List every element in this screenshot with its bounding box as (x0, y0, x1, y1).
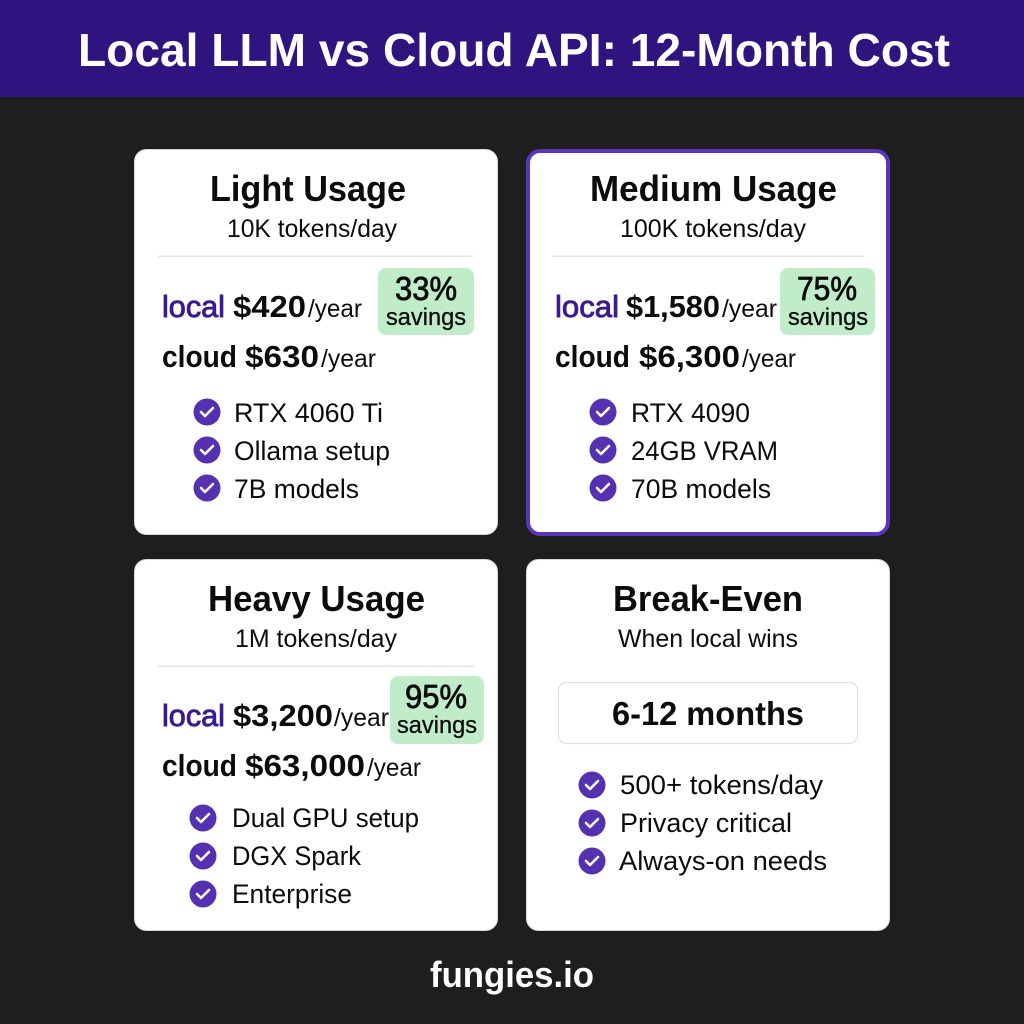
heading: medium usage: Medium Usage (590, 168, 837, 209)
cloud price (162, 339, 376, 374)
cloud price: $63,000 (245, 748, 365, 783)
local price: local (555, 289, 619, 324)
feature list: heavy (190, 803, 419, 909)
cloud price: cloud (162, 748, 237, 783)
feature list: light: RTX 4060 Ti (234, 398, 383, 428)
heading: heavy usage: Heavy Usage (208, 578, 425, 619)
callout: 6-12 months (558, 682, 858, 744)
savings badge: 95%: 95% (405, 678, 467, 715)
feature list: medium: RTX 4090 (631, 398, 750, 428)
local price: local (162, 289, 225, 324)
local price: $420 (233, 289, 306, 324)
local price: /year (722, 295, 777, 323)
savings badge: 33%: 33% (395, 270, 457, 307)
local price (555, 289, 777, 324)
cloud price: /year (321, 345, 376, 373)
cloud price: cloud (162, 339, 237, 374)
local price: $3,200 (233, 698, 333, 733)
subheading: tokens per day: 100K tokens/day (620, 215, 806, 243)
savings badge: 95% (390, 676, 484, 744)
subheading: tokens per day: 1M tokens/day (235, 625, 397, 653)
callout: 6-12 months: 6-12 months (612, 695, 804, 732)
local price: local (162, 698, 225, 733)
title: Local LLM vs Cloud API: 12-Month Cost (78, 24, 950, 76)
cloud price: /year (742, 345, 796, 373)
savings badge: 75% (780, 268, 875, 335)
panel: medium usage (highlighted) (528, 151, 888, 534)
panel: heavy usage (134, 560, 498, 930)
feature list: heavy: DGX Spark (232, 841, 361, 871)
savings badge: 95%: savings (397, 712, 477, 739)
feature list: medium (590, 398, 778, 504)
heading: light usage: Light Usage (210, 168, 406, 209)
feature list: light: Ollama setup (234, 436, 390, 466)
local price: $1,580 (626, 289, 720, 324)
feature list: heavy: Dual GPU setup (232, 803, 419, 833)
subheading: tokens per day: 10K tokens/day (227, 215, 397, 243)
panel: light usage (134, 150, 498, 534)
cloud price: cloud (555, 339, 630, 374)
feature list: heavy: Enterprise (232, 879, 352, 909)
local price (162, 698, 389, 733)
local price: /year (334, 704, 389, 732)
panel: break-even (526, 560, 890, 930)
cloud price: $6,300 (639, 339, 740, 374)
savings badge: 75%: savings (788, 304, 868, 331)
feature list: break-even: 500+ tokens/day (620, 770, 824, 800)
savings badge: 33%: savings (386, 304, 466, 331)
local price: /year (308, 295, 362, 323)
feature list: break-even: Privacy critical (620, 808, 792, 838)
feature list: break-even (578, 770, 827, 876)
heading: break-even: Break-Even (613, 578, 803, 619)
local price (162, 289, 362, 324)
feature list: light (194, 398, 390, 504)
feature list: medium: 70B models (631, 474, 771, 504)
feature list: light: 7B models (234, 474, 359, 504)
cloud price (555, 339, 796, 374)
feature list: medium: 24GB VRAM (631, 436, 778, 466)
header band (0, 0, 1024, 97)
savings badge: 33% (378, 268, 474, 335)
footer brand: fungies.io (430, 954, 594, 995)
cloud price (162, 748, 421, 783)
cloud price: /year (367, 754, 421, 782)
cloud price: $630 (245, 339, 319, 374)
savings badge: 75%: 75% (797, 270, 857, 307)
feature list: break-even: Always-on needs (619, 846, 827, 876)
subheading: when local wins: When local wins (618, 625, 798, 653)
